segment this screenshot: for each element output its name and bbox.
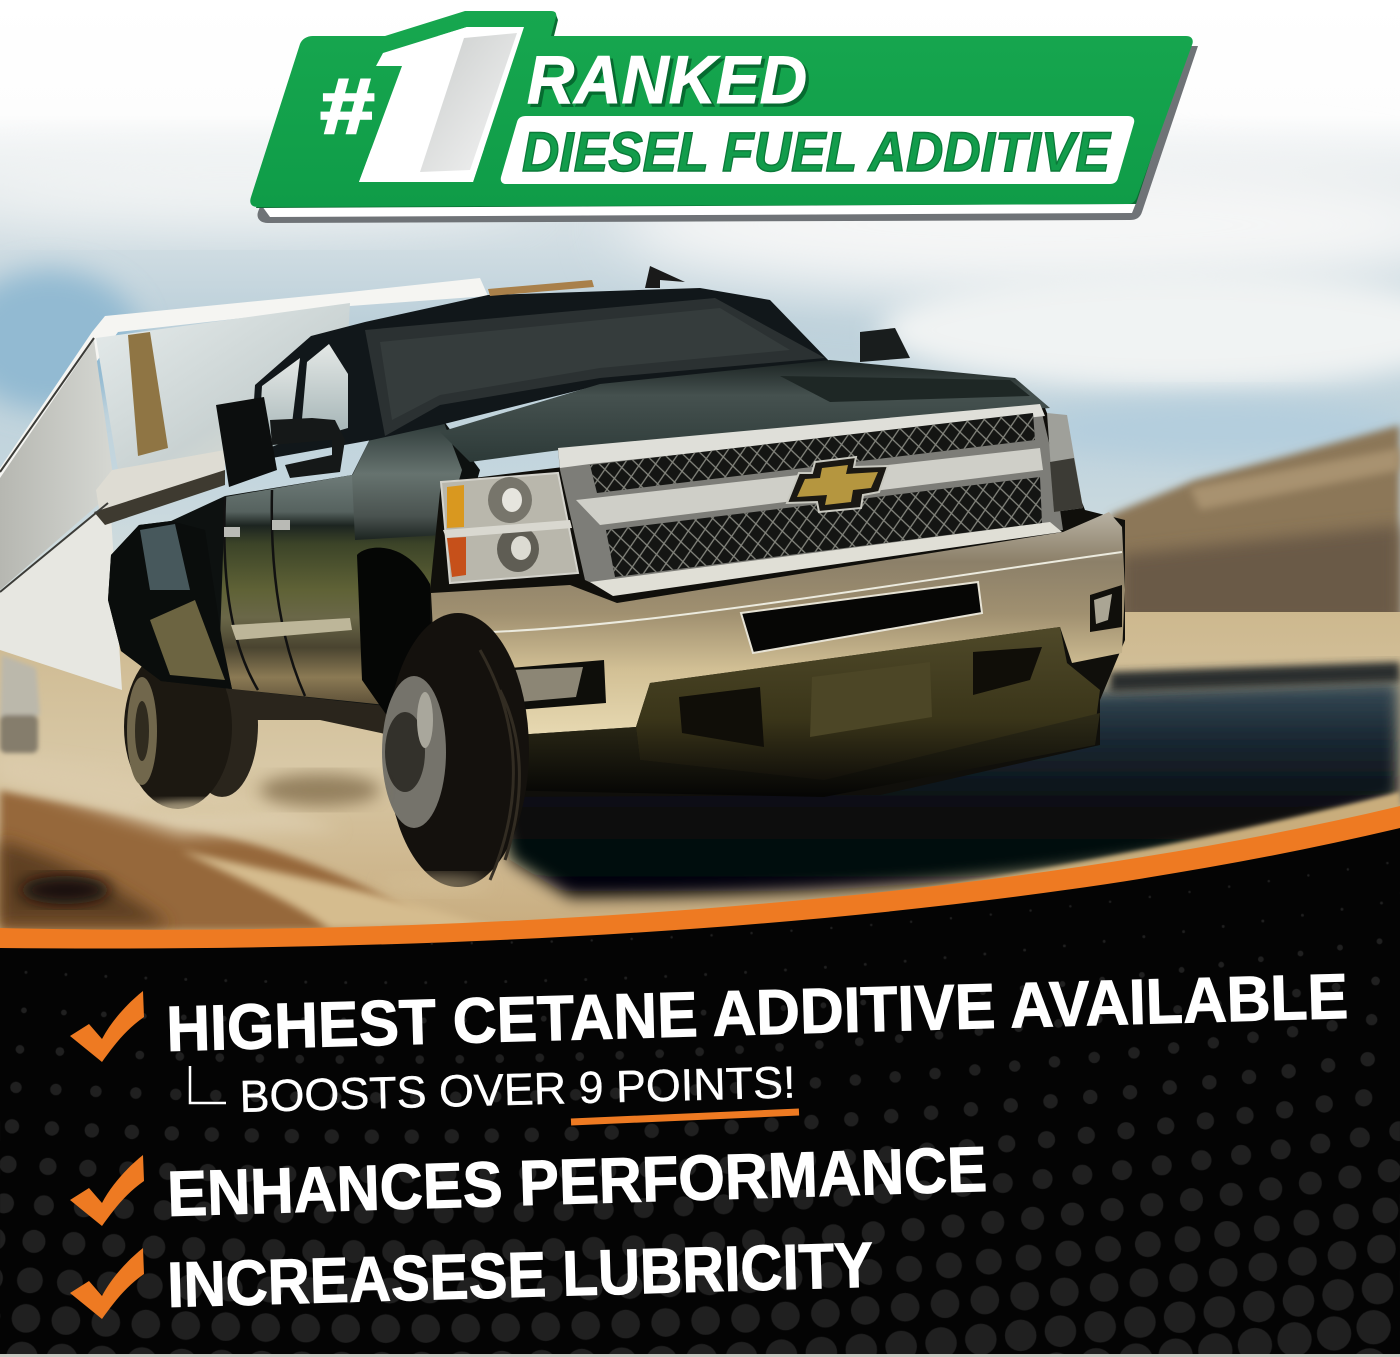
front wheel well: [357, 548, 440, 720]
door handles: [224, 520, 290, 537]
lower air dam: [636, 627, 1100, 780]
banner drop shadow: [257, 46, 1198, 223]
chrome bumper: [431, 512, 1125, 738]
chevrolet bowtie emblem: [787, 457, 888, 512]
black panel: [0, 828, 1400, 1357]
RANKED: RANKED: [527, 42, 807, 118]
hash mark: #: [319, 62, 374, 150]
truck: [108, 266, 1125, 887]
benefit 3 heading: INCREASESE LUBRICITY: [166, 1229, 874, 1321]
bottom edge strip: [0, 1354, 1400, 1357]
benefit 2 heading: ENHANCES PERFORMANCE: [166, 1133, 988, 1230]
RANKED: RANKED: [530, 45, 810, 121]
body trim: [231, 618, 352, 640]
left headlight: [441, 473, 578, 583]
front side window: [300, 344, 348, 442]
door panels: [220, 475, 443, 705]
truck side body: [108, 420, 480, 706]
upper grille mesh: [590, 413, 1035, 493]
door seams: [224, 490, 305, 696]
trailer wheel: [0, 655, 40, 753]
front tire: [387, 613, 529, 887]
sub-bullet elbow: [190, 1066, 226, 1103]
DIESEL FUEL ADDITIVE: DIESEL FUEL ADDITIVE: [522, 120, 1112, 183]
orange swoosh: [0, 806, 1400, 951]
chrome grille frame: [558, 405, 1063, 593]
left fog lamp: [510, 660, 606, 710]
number one shaded face: [420, 33, 517, 172]
trailer lower side panel: [0, 500, 122, 690]
banner white lip: [262, 203, 1136, 217]
lower chrome bar: [590, 522, 1062, 596]
wood reflection: [128, 332, 168, 456]
benefit 1 heading: HIGHEST CETANE ADDITIVE AVAILABLE: [165, 960, 1349, 1065]
right fog lamp: [1090, 585, 1122, 632]
cab roof and pillars: [250, 288, 830, 462]
benefit 3 checkmark: [70, 1248, 144, 1319]
front rim: [382, 676, 446, 828]
tire tread highlights: [480, 650, 519, 880]
banner dark edge: [256, 12, 1190, 208]
benefit 1 checkmark: [70, 991, 144, 1062]
white subtitle box: [501, 116, 1134, 184]
trailer roof cap: [0, 278, 488, 495]
driver tow mirror: [216, 397, 277, 487]
antenna: [645, 266, 685, 288]
front fender steel reflection: [352, 420, 462, 540]
trailer upper side panel: [0, 340, 115, 590]
wheel dust: [135, 774, 490, 895]
rear side window: [258, 358, 300, 452]
trailer chin: [96, 450, 225, 515]
title banner: [250, 11, 1198, 223]
distant rocky hills: [1110, 425, 1400, 625]
orange underline: [571, 1112, 799, 1122]
lower grille mesh: [606, 477, 1042, 577]
trailer: [0, 278, 488, 753]
passenger mirror: [860, 328, 910, 362]
background sky: [0, 0, 1400, 640]
middle chrome bar: [576, 448, 1043, 525]
right headlight: [1047, 413, 1083, 512]
rear dually wheels: [124, 645, 258, 809]
benefit 1 detail: BOOSTS OVER 9 POINTS!: [239, 1056, 796, 1122]
license plate slot: [741, 582, 982, 653]
mirror arms: [270, 418, 345, 478]
banner green shape: [250, 11, 1193, 207]
hood: [440, 360, 1050, 462]
lower valance: [470, 713, 1100, 797]
benefit 2 checkmark: [70, 1155, 144, 1226]
chassis underside: [250, 690, 390, 735]
halftone dot texture: [0, 828, 1400, 1354]
road and dirt ground: [0, 612, 1400, 952]
trailer edge lines: [0, 338, 108, 592]
trailer front reflection: [96, 303, 350, 470]
rear fender: [108, 521, 232, 689]
windshield: [365, 298, 825, 436]
upper chrome bar: [558, 404, 1045, 468]
roof marker lights: [488, 280, 594, 296]
front fascia base: [430, 408, 1125, 797]
bumper crease: [434, 552, 1122, 633]
